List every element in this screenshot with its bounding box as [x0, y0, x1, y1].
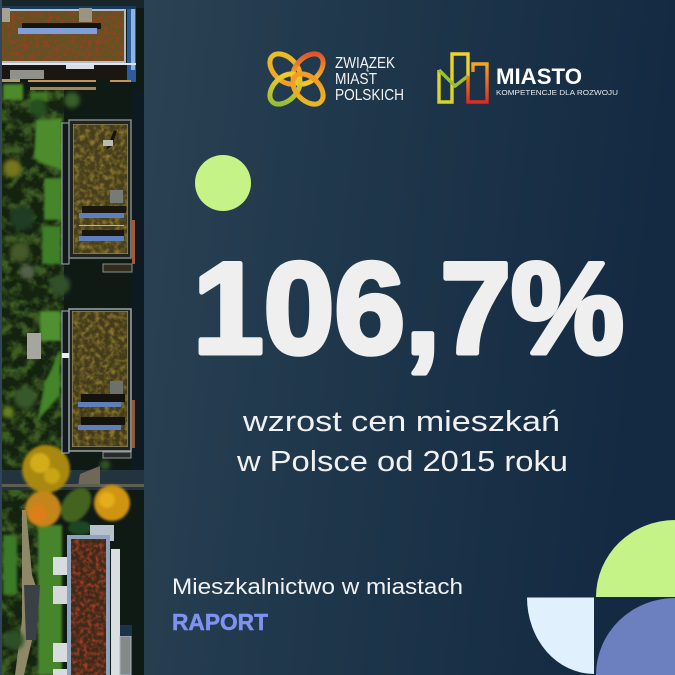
road and footpath [2, 470, 144, 490]
building 4 [90, 525, 114, 541]
logo: Miasto [439, 54, 618, 102]
logo: Miasto: KOMPETENCJE DLA ROZWOJU [496, 88, 618, 97]
logo text: MIAST [335, 71, 377, 88]
trees and shrubs [2, 92, 110, 650]
logo text: ZWIĄZEK [335, 55, 396, 72]
aerial photo of green-roof buildings [2, 0, 144, 675]
subtitle [236, 406, 568, 478]
headline figure: 106,7% [193, 235, 624, 381]
header logos [264, 48, 618, 110]
building 3 [62, 311, 69, 453]
lawns and garden [3, 84, 62, 675]
report label [172, 574, 463, 635]
logo text: MIASTO [496, 64, 582, 89]
building 2 [62, 123, 69, 264]
building 1 [2, 7, 126, 63]
subtitle: w Polsce od 2015 roku [236, 446, 568, 478]
icon: interlaced rings [264, 48, 329, 110]
icon: M-shaped skyline [439, 54, 487, 102]
report label: Mieszkalnictwo w miastach [172, 574, 463, 599]
decorative quarter circles [527, 520, 675, 675]
logo: Związek Miast Polskich [264, 48, 404, 110]
decorative green circle [195, 155, 251, 211]
report label: RAPORT [172, 609, 268, 635]
subtitle: wzrost cen mieszkań [242, 406, 560, 438]
logo text: POLSKICH [335, 87, 404, 104]
autumn trees [22, 445, 130, 535]
logo text [335, 55, 404, 104]
